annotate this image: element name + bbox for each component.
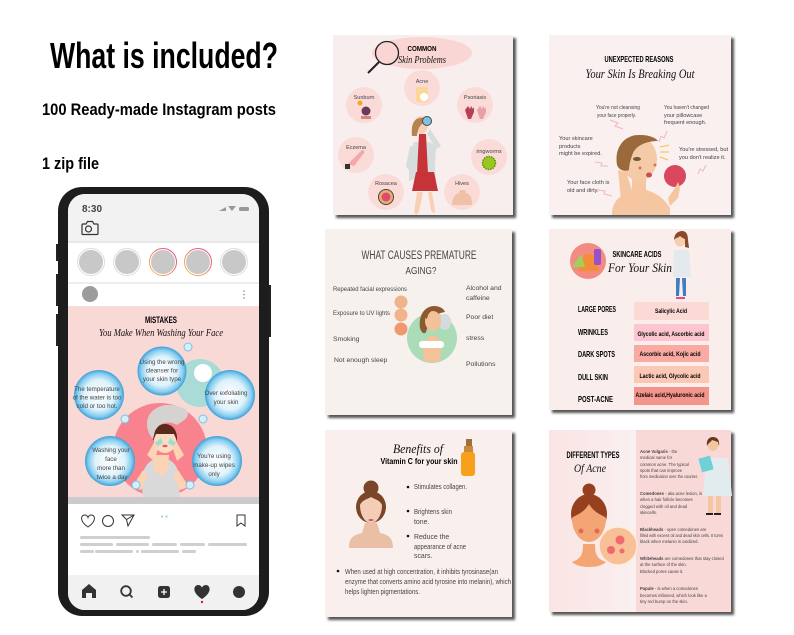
heading: [362, 250, 477, 277]
subtitle: posts: 100 Ready-made Instagram posts: [42, 100, 276, 119]
script heading: For Your Skin: [607, 260, 672, 275]
acne definitions: common acne. The typical: [640, 462, 689, 467]
icon: serum bottle: [461, 439, 475, 476]
reason texts: your face properly.: [597, 113, 636, 119]
reason texts: You haven't changed: [664, 105, 709, 111]
causes right: [466, 285, 502, 368]
row: wrinkles: Glycolic acid, Ascorbic acid: [638, 331, 705, 338]
acne definitions: spots that can improve: [640, 468, 683, 473]
row: large pores: LARGE PORES: [578, 304, 616, 314]
topic: acne: [404, 70, 440, 106]
post image: [68, 306, 259, 504]
row: wrinkles: WRINKLES: [578, 327, 608, 337]
icon: camera: [82, 222, 98, 234]
teal circle: [176, 359, 224, 407]
reason texts: frequent enough.: [664, 120, 707, 126]
script heading: Skin Problems: [398, 55, 446, 66]
bubble: over exfoliating: [204, 370, 255, 420]
yellow accent marks: [660, 145, 669, 160]
acne definitions: at the surface of the skin.: [640, 562, 687, 567]
reason texts: products: [559, 144, 581, 150]
topic: psoriasis: [457, 87, 493, 123]
row: post-acne: POST-ACNE: [578, 394, 613, 404]
status bar: 8:30: [82, 204, 102, 215]
acne definitions: filled with excess oil and dead skin cells. It turns: [640, 533, 723, 538]
row: dark spots: Ascorbic acid, Kojic acid: [640, 351, 701, 358]
topic: ringworms: ringworms: [476, 149, 502, 155]
row: dark spots: [578, 345, 709, 362]
row: dark spots: DARK SPOTS: [578, 349, 615, 359]
script heading: Of Acne: [574, 461, 607, 475]
bubble: washing twice: more than: [97, 465, 125, 472]
reason texts: You're stressed, but: [679, 147, 729, 153]
script heading: Benefits of: [393, 441, 445, 456]
pink squiggle arrows: [595, 120, 706, 196]
acne definitions: Papule - is when a comedones: [640, 586, 698, 591]
bubble: wrong cleanser: cleanser for: [146, 368, 178, 374]
row: dull skin: DULL SKIN: [578, 372, 608, 382]
reason texts: Your skincare: [559, 136, 593, 142]
causes right: Pollutions: [466, 361, 496, 368]
reason texts: You're not cleansing: [596, 105, 640, 111]
acne definitions: clogged with oil and dead: [640, 504, 688, 509]
acne definitions: Whiteheads are comedones that stay closed: [640, 556, 724, 561]
acne definitions: black when melanin is oxidized.: [640, 539, 699, 544]
bubble: over exfoliating: Over exfoliating: [204, 390, 248, 397]
heading: DIFFERENT TYPES: [566, 450, 620, 460]
topic: acne: Acne: [416, 79, 428, 85]
bubble: water temperature: cold or too hot.: [77, 403, 118, 410]
bottom note: helps lighten pigmentations.: [345, 589, 420, 596]
acne definitions: Acne Vulgaris - the: [640, 449, 678, 454]
benefit bullets: [407, 484, 467, 560]
sad face with acne: [571, 484, 637, 567]
row: dull skin: [578, 366, 709, 383]
acne definitions: medical name for: [640, 455, 673, 460]
benefit bullets: Stimulates collagen.: [414, 484, 467, 491]
row: wrinkles: [578, 324, 709, 341]
post subheading: You Make When Washing Your Face: [99, 328, 223, 339]
bubble: washing twice: face: [105, 456, 117, 463]
bubble: washing twice: Washing your: [92, 447, 130, 454]
panel: unexpected reasons: [549, 35, 734, 218]
benefit bullets: tone.: [414, 519, 429, 526]
acne definitions: Blocked pores cause it.: [640, 569, 683, 574]
bubble: washing twice: [85, 436, 135, 486]
causes right: stress: [466, 335, 485, 342]
bubble: wrong cleanser: Using the wrong: [140, 359, 185, 366]
post heading: MISTAKES: [145, 315, 177, 325]
topic: rosacea: Rosacea: [375, 181, 398, 187]
acne definitions: becomes inflamed, which look like a: [640, 593, 707, 598]
bubble: washing twice: twice a day: [97, 474, 128, 481]
causes left: Not enough sleep: [334, 357, 388, 364]
bottom navigation: [68, 575, 259, 610]
woman portrait: [349, 480, 393, 548]
panel: vitamin c benefits: [325, 430, 515, 620]
benefit bullets: Brightens skin: [414, 509, 452, 516]
reason texts: Your face cloth is: [567, 180, 610, 186]
causes right: Poor diet: [466, 314, 493, 321]
row: post-acne: Azelaic acid,Hyaluronic acid: [636, 392, 705, 399]
heading: WHAT CAUSES PREMATURE: [362, 250, 477, 262]
row: large pores: Salicylic Acid: [655, 308, 687, 315]
doctor with clipboard: [698, 437, 732, 515]
subtitle: zip file: 1 zip file: [42, 154, 99, 173]
doctor with magnifier: [406, 116, 441, 215]
topic: sunburn: [346, 87, 382, 123]
status bar: [82, 204, 249, 215]
bubble: make-up wipes: You're using: [197, 453, 231, 460]
causes left: Repeated facial expressions: [333, 286, 408, 293]
post avatar: [82, 286, 98, 302]
bottom note: When used at high concentration, it inhibits tyrosinase(an: [345, 569, 498, 576]
acne definitions: [640, 449, 724, 604]
bottom note: [337, 569, 511, 596]
bubble: over exfoliating: your skin: [214, 399, 239, 406]
pink circle with woman: [113, 403, 207, 497]
panel: common skin problems: [333, 35, 516, 218]
carousel dots: [161, 516, 168, 518]
heading: Vitamin C for your skin: [380, 456, 458, 466]
heading: SKINCARE ACIDS: [612, 250, 662, 259]
bottom note: enzyme that converts amino acid tyrosine into melanin), which: [345, 579, 511, 586]
bubble: make-up wipes: [192, 436, 242, 486]
woman with mirror: [612, 135, 686, 215]
heading: COMMON: [408, 44, 436, 53]
benefit bullets: scars.: [414, 553, 432, 560]
topic: ringworms: [471, 139, 507, 175]
woman in lab coat: [673, 231, 691, 299]
reason texts: your pillowcase: [664, 113, 702, 119]
acne definitions: Comedones - aka acne lesion, is: [640, 491, 702, 496]
benefit bullets: Reduce the: [414, 534, 449, 541]
topic: rosacea: [368, 174, 404, 210]
topic: psoriasis: Psoriasis: [464, 95, 486, 101]
reason texts: might be expired.: [559, 151, 602, 157]
acne definitions: skincells.: [640, 510, 657, 515]
bubble: water temperature: The temperature: [74, 386, 120, 393]
heading: AGING?: [406, 265, 437, 277]
stories row: [78, 248, 248, 276]
script heading: Your Skin Is Breaking Out: [586, 67, 695, 81]
woman illustration: [394, 296, 457, 363]
topic: sunburn: Sunburn: [354, 95, 374, 101]
acne definitions: when a hair follicle becomes: [640, 497, 693, 502]
causes left: Smoking: [333, 336, 360, 343]
bubble: water temperature: [73, 370, 124, 420]
heading: UNEXPECTED REASONS: [604, 54, 674, 64]
reason texts: [559, 105, 729, 194]
icon: lab flasks: [570, 243, 606, 279]
bubble: make-up wipes: only: [208, 471, 221, 478]
causes right: Alcohol and: [466, 285, 502, 292]
row: dull skin: Lactic acid, Glycolic acid: [640, 373, 701, 380]
reason texts: old and dirty.: [567, 188, 599, 194]
topic: eczema: [338, 137, 374, 173]
causes left: [333, 286, 408, 364]
title: What is included?: [50, 35, 278, 76]
row: post-acne: [578, 387, 709, 405]
row: large pores: [578, 302, 709, 320]
panel: skincare acids: [549, 229, 734, 413]
post actions: [82, 515, 245, 527]
panel: types of acne: [549, 430, 734, 615]
small bubbles: [121, 343, 207, 489]
header ellipse: [372, 37, 472, 69]
causes right: caffeine: [466, 295, 490, 302]
topic: eczema: Eczema: [346, 145, 367, 151]
bubble: wrong cleanser: [138, 346, 186, 396]
reason texts: you don't realize it.: [679, 155, 726, 161]
acne definitions: from medication over the counter.: [640, 474, 698, 479]
acne definitions: tiny red bump on the skin.: [640, 599, 688, 604]
bubble: water temperature: of the water is too: [73, 394, 122, 402]
acne definitions: Blackheads - open comedones are: [640, 527, 707, 532]
caption placeholder lines: [80, 536, 247, 553]
topic: hives: Hives: [455, 181, 469, 187]
causes left: Exposure to UV lights: [333, 310, 391, 317]
topic: hives: [444, 174, 480, 210]
benefit bullets: appearance of acne: [414, 544, 466, 551]
icon: magnifier: [368, 42, 398, 73]
panel: premature aging: [325, 229, 515, 418]
phone mockup: [56, 187, 271, 616]
bubble: make-up wipes: make-up wipes: [193, 462, 235, 469]
bubble: wrong cleanser: your skin type: [143, 376, 182, 383]
menu dots: [243, 290, 245, 299]
